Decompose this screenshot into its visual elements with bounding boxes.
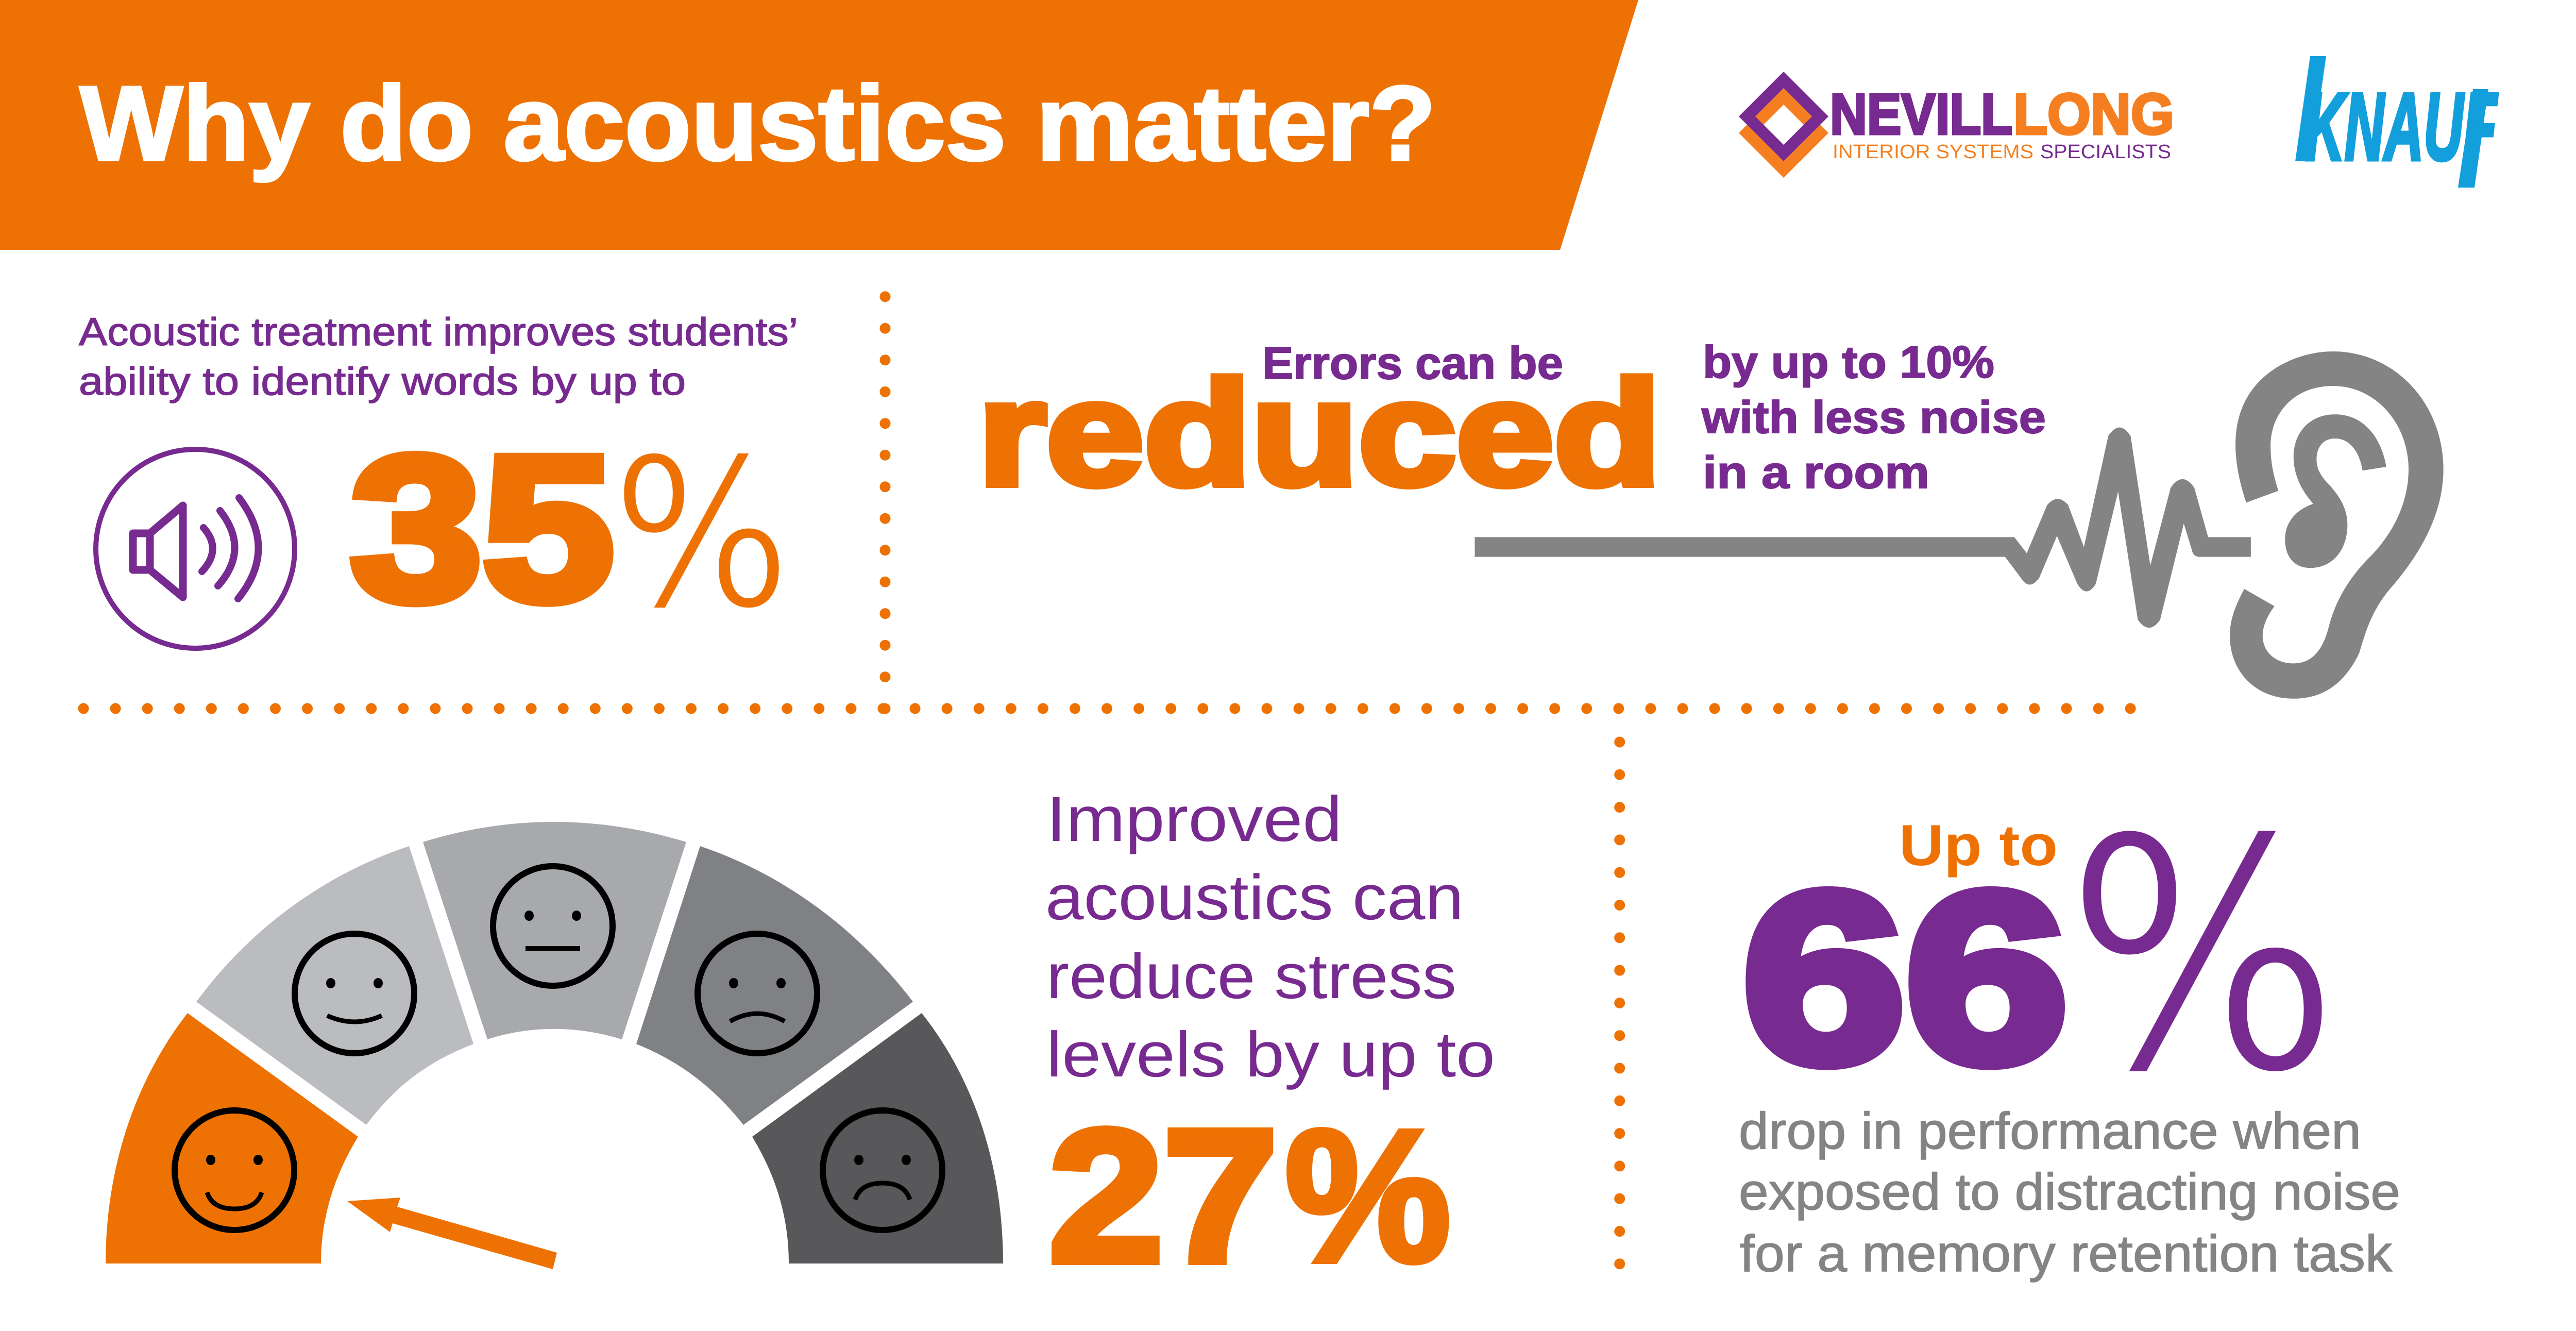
stat: stress text: levels by up to	[1046, 1019, 1495, 1090]
stat: 66%	[1742, 768, 2340, 1146]
stat: 35%: %	[612, 413, 791, 656]
stat: stress text: reduce stress	[1046, 941, 1456, 1012]
stat: memory task text: for a memory retention task	[1740, 1225, 2393, 1283]
title: Why do acoustics matter?	[80, 64, 1436, 182]
stat: errors reduced: in a room	[1703, 447, 1929, 498]
divider: vertical dots lower	[1614, 742, 1625, 1265]
stat: memory task text: drop in performance when	[1739, 1102, 2361, 1160]
icon: speaker in circle	[96, 449, 295, 648]
gauge segment: darkest sad	[752, 1013, 1003, 1263]
gauge: stress meter	[106, 822, 1003, 1263]
stat: 27%	[1049, 1091, 1451, 1301]
stat: 27%: 27	[1049, 1091, 1278, 1301]
stat: 66%: %	[2065, 768, 2340, 1146]
logo: Nevill Long: LONG	[2013, 82, 2174, 146]
gauge segment: happy orange	[106, 1013, 358, 1263]
stat: memory task text: exposed to distracting noise	[1739, 1163, 2400, 1221]
stat: 27%: %	[1285, 1091, 1451, 1301]
stat: errors reduced: by up to 10%	[1703, 336, 1994, 387]
stat: 35%	[350, 413, 791, 656]
logo: Nevill Long: INTERIOR SYSTEMS	[1833, 141, 2033, 163]
header banner	[0, 0, 1638, 250]
stat: up to label: Up to	[1899, 813, 2058, 878]
stat: errors reduced: Errors can be	[1262, 338, 1563, 389]
stat: errors reduced	[978, 336, 2046, 516]
logo: Knauf	[2295, 56, 2498, 188]
divider: horizontal dots	[83, 703, 2131, 714]
gauge segment: mid grey neutral	[423, 822, 686, 1039]
stat: stress text	[1045, 784, 1495, 1090]
logo: Nevill Long: SPECIALISTS	[2040, 141, 2171, 163]
gauge segment: light grey smile	[196, 846, 473, 1125]
stat: identify words text: Acoustic treatment improves students’	[79, 310, 798, 354]
icon: ear	[2230, 351, 2444, 699]
stat: stress text: Improved	[1046, 784, 1342, 855]
divider: vertical dots upper	[880, 297, 890, 709]
stat: 35%: 35	[350, 413, 614, 644]
stat: errors reduced: with less noise	[1701, 392, 2046, 443]
stat: stress text: acoustics can	[1045, 862, 1464, 933]
stat: memory task text	[1739, 1102, 2400, 1283]
stat: identify words text	[79, 310, 798, 403]
arrow: gauge pointer	[347, 1198, 557, 1269]
stat: 66%: 66	[1742, 843, 2068, 1113]
logo: Nevill Long	[1739, 72, 2174, 178]
stat: errors reduced: reduced	[978, 350, 1661, 516]
icon: sound wave	[1475, 427, 2251, 628]
gauge segment: dark grey frown	[636, 846, 913, 1125]
stat: identify words text: ability to identify words by up to	[79, 360, 686, 403]
logo: Nevill Long: NEVILL	[1830, 82, 2012, 146]
